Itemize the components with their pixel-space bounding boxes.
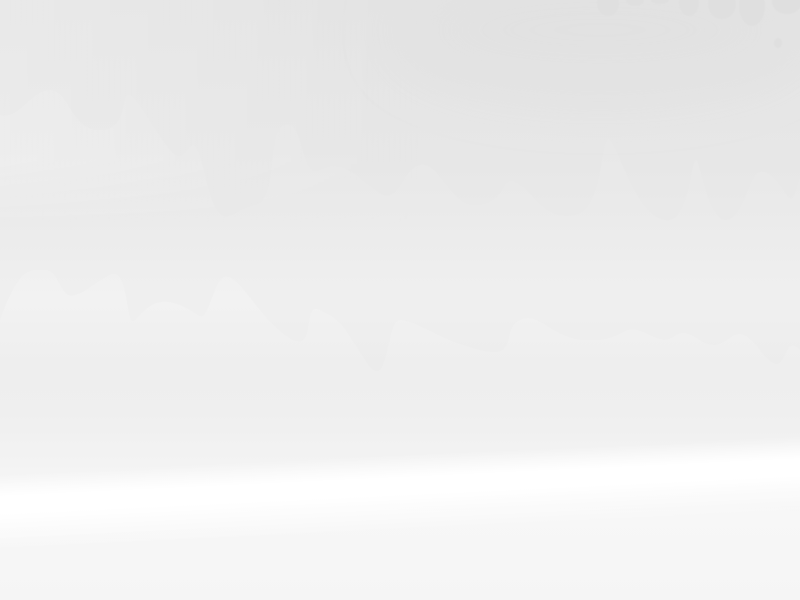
- drip texture middle band: [0, 0, 800, 371]
- blotches at top right: [597, 0, 800, 48]
- darker top right haze: [400, 0, 800, 90]
- white diagonal streak: [0, 434, 800, 552]
- drip texture upper band: [0, 0, 800, 220]
- lighter upper left: [0, 0, 420, 230]
